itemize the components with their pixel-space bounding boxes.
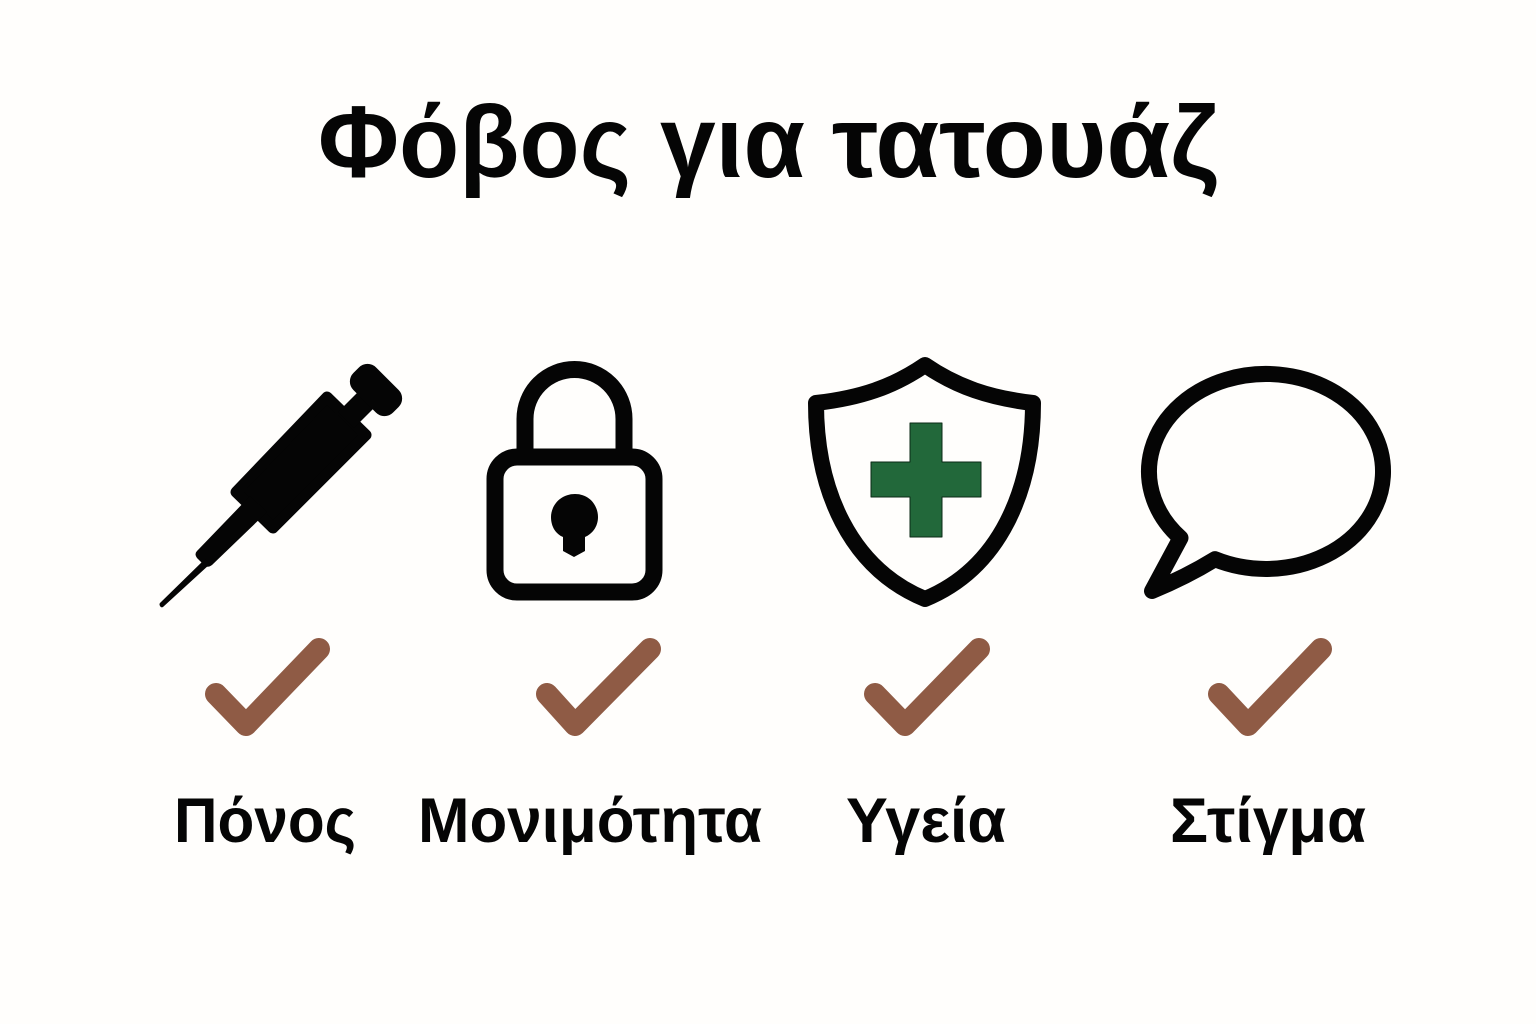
syringe tube (196, 496, 267, 567)
icon: check mark 3 (875, 649, 979, 725)
icon: check mark 1 (216, 649, 319, 725)
title: τατουάζ (832, 85, 1218, 199)
syringe needle (160, 559, 210, 607)
label: stigma: Στίγμα (1170, 786, 1366, 856)
icon: check mark 4 (1219, 649, 1321, 725)
label: permanence: Μονιμότητα (418, 786, 762, 856)
shield outline (816, 365, 1033, 599)
icon: padlock (495, 370, 654, 592)
label: pain: Πόνος (174, 786, 356, 856)
label: health: Υγεία (846, 786, 1006, 856)
icon: syringe (160, 359, 407, 607)
padlock keyhole (551, 494, 598, 557)
title: Φόβος (318, 85, 631, 199)
syringe barrel (236, 397, 366, 528)
syringe plunger stem (338, 390, 376, 428)
title: για (660, 85, 805, 199)
green cross (871, 423, 981, 537)
padlock body (495, 457, 654, 592)
padlock shackle (525, 370, 624, 452)
syringe plunger head (345, 359, 407, 421)
icon: speech bubble (1149, 374, 1383, 591)
icon: shield with cross (816, 365, 1033, 599)
icon: check mark 2 (547, 649, 650, 725)
title (318, 85, 1218, 199)
